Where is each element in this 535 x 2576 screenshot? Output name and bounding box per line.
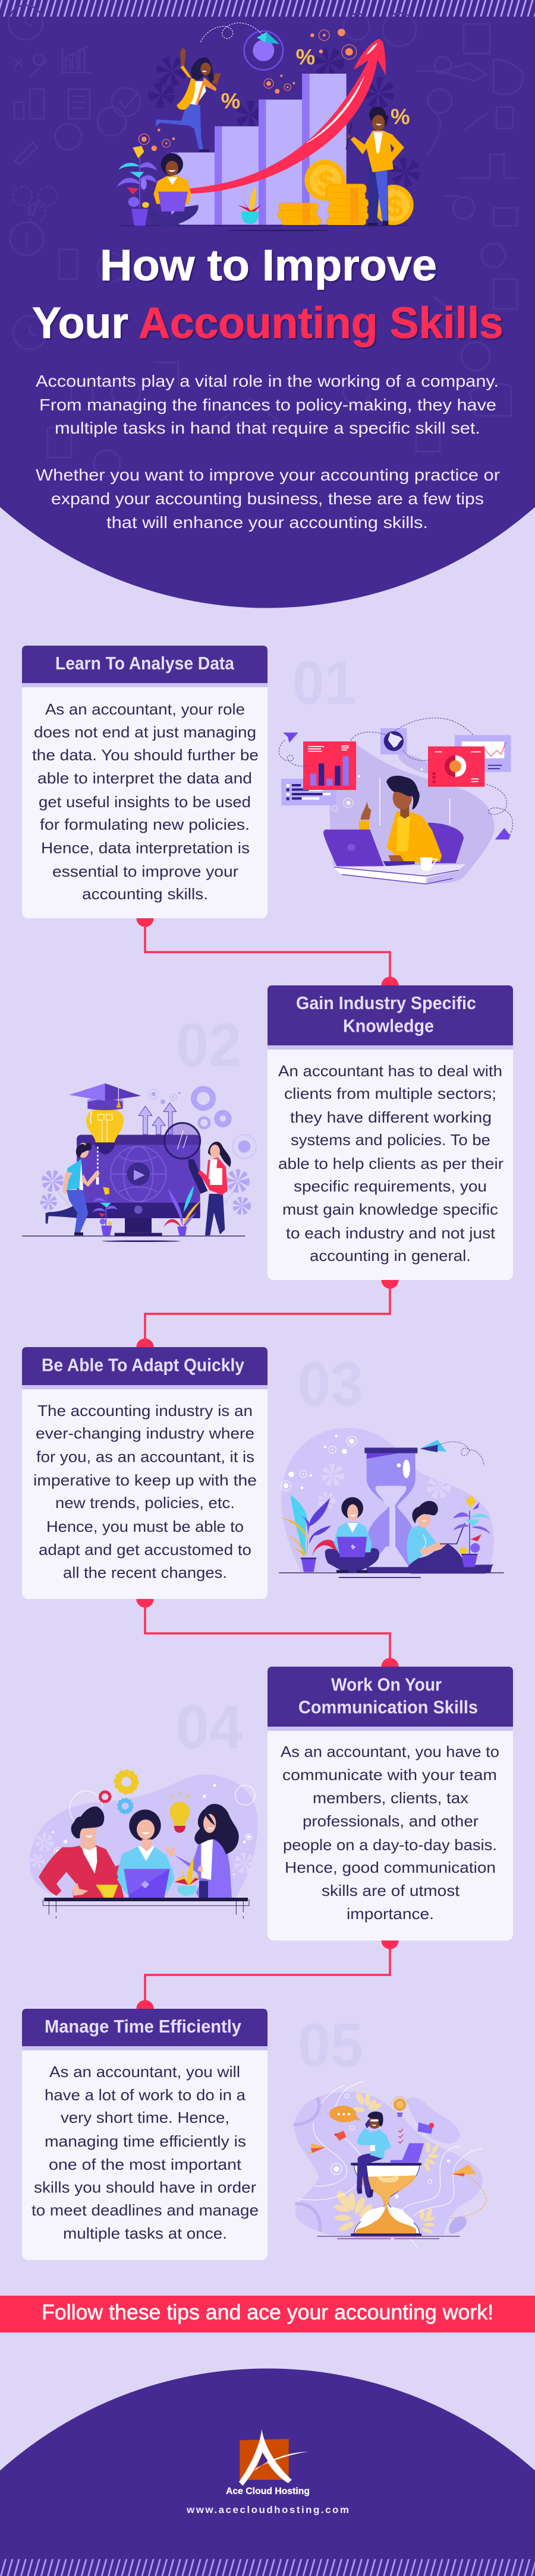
heading [298, 1674, 478, 1718]
intro text [36, 372, 500, 532]
company name: Ace Cloud Hosting [226, 2486, 310, 2496]
circle and paper plane [201, 23, 283, 70]
body text [281, 1743, 499, 1923]
title: How to Improve [100, 241, 437, 290]
body text: specific requirements, you [294, 1177, 487, 1195]
intro text: multiple tasks in hand that require a specific skill set. [55, 419, 480, 437]
intro text: that will enhance your accounting skills. [106, 513, 428, 532]
body text: imperative to keep up with the [33, 1471, 257, 1489]
body text: all the recent changes. [63, 1563, 227, 1581]
logo [239, 2429, 309, 2486]
body text: they have different working [290, 1108, 492, 1126]
body text: for formulating new policies. [40, 816, 250, 833]
body text: one of the most important [49, 2155, 242, 2173]
body text: As an accountant, your role [45, 700, 245, 718]
body text [33, 1402, 257, 1581]
callout: closing banner [0, 2296, 535, 2332]
heading: Work On Your [331, 1674, 442, 1695]
illustration: time management [293, 2081, 486, 2247]
body text: skills you should have in order [34, 2179, 256, 2196]
jumping woman [156, 48, 221, 152]
body text [278, 1062, 503, 1265]
body text: essential to improve your [52, 862, 238, 880]
body text: managing time efficiently is [45, 2132, 246, 2150]
orange dots [139, 29, 357, 151]
body text: able to help clients as per their [278, 1155, 503, 1172]
number 05: 05 [298, 2011, 363, 2080]
body text: skills are of utmost [322, 1882, 460, 1899]
body text [32, 2063, 259, 2242]
footer stripes [0, 2559, 535, 2576]
illustration: team communication [30, 1771, 258, 1918]
body text: Hence, data interpretation is [41, 839, 250, 856]
percent signs: % [221, 88, 240, 113]
body text: accounting skills. [82, 885, 208, 903]
body text: Hence, good communication [285, 1858, 496, 1876]
body text: must gain knowledge specific [282, 1200, 498, 1218]
website: www.acecloudhosting.com [186, 2504, 349, 2515]
coins: $ [317, 165, 334, 198]
heading: Communication Skills [298, 1696, 478, 1718]
body text: An accountant has to deal with [278, 1062, 502, 1080]
number 01: 01 [292, 649, 356, 718]
body text: Hence, you must be able to [46, 1518, 244, 1535]
intro text: Whether you want to improve your accounting practice or [36, 466, 500, 484]
title: Your [32, 298, 128, 347]
body text: members, clients, tax [313, 1789, 468, 1807]
heading: Learn To Analyse Data [55, 653, 235, 674]
leaves [156, 55, 413, 180]
panel: step 3 [22, 1347, 268, 1599]
body text: multiple tasks at once. [63, 2224, 227, 2242]
number 03: 03 [298, 1350, 363, 1419]
percent signs: % [296, 45, 315, 69]
illustration: data analyst [279, 718, 512, 884]
body text: to meet deadlines and manage [32, 2201, 259, 2219]
heading [296, 993, 476, 1036]
body text: get useful insights to be used [39, 793, 251, 811]
heading: Manage Time Efficiently [45, 2016, 242, 2037]
intro text: expand your accounting business, these are a few tips [51, 489, 484, 508]
body text: adapt and get accustomed to [39, 1541, 251, 1559]
ground [121, 225, 407, 231]
hero illustration [117, 23, 414, 231]
body text: The accounting industry is an [37, 1402, 253, 1420]
connector lines [136, 909, 399, 2018]
body text: people on a day-to-day basis. [283, 1836, 497, 1854]
intro text: From managing the finances to policy-making, they have [39, 396, 496, 414]
title: Accounting Skills [139, 298, 503, 347]
body text: for you, as an accountant, it is [36, 1448, 254, 1466]
body text: importance. [347, 1905, 434, 1923]
body text: ever-changing industry where [36, 1424, 254, 1442]
body text: very short time. Hence, [61, 2109, 229, 2126]
plant [117, 146, 158, 226]
percent signs [221, 45, 410, 129]
coins: $ [386, 190, 403, 223]
bars [171, 74, 347, 225]
potted plant center [238, 186, 262, 224]
body text: professionals, and other [303, 1812, 479, 1830]
heading: Knowledge [343, 1016, 434, 1036]
illustration: hourglass and people [278, 1428, 504, 1578]
callout: closing banner: Follow these tips and ace your accounting work! [42, 2300, 493, 2324]
panel: hero header [0, 0, 535, 608]
body text: systems and policies. To be [291, 1131, 490, 1149]
panel: step 4 [268, 1667, 513, 1940]
number 04: 04 [176, 1693, 243, 1762]
body text: clients from multiple sectors; [284, 1085, 496, 1102]
panel: step 2 [268, 985, 513, 1280]
body text: communicate with your team [282, 1766, 497, 1784]
coins [278, 160, 414, 225]
body text: does not end at just managing [34, 723, 256, 741]
panel: footer [0, 2369, 535, 2576]
body text: the data. You should further be [32, 746, 259, 764]
panel: step 1 [22, 646, 268, 918]
top stripes [0, 0, 535, 17]
standing person [346, 106, 404, 226]
body text [32, 700, 259, 903]
body text: As an accountant, you have to [281, 1743, 499, 1760]
growth arrow [189, 39, 386, 194]
heading: Gain Industry Specific [296, 993, 476, 1013]
panel: step 5 [22, 2009, 268, 2260]
body text: new trends, policies, etc. [55, 1494, 235, 1512]
faint background icons [8, 5, 523, 476]
sitting person [149, 153, 199, 227]
title [32, 241, 503, 347]
percent signs: % [391, 105, 410, 129]
heading: Be Able To Adapt Quickly [42, 1354, 245, 1376]
body text: As an accountant, you will [49, 2063, 240, 2081]
number 02: 02 [176, 1011, 241, 1080]
body text: accounting in general. [310, 1247, 471, 1265]
illustration: knowledge monitor [22, 1083, 256, 1242]
body text: to each industry and not just [286, 1224, 496, 1242]
body text: have a lot of work to do in a [45, 2086, 246, 2104]
body text: able to interpret the data and [37, 769, 252, 787]
intro text: Accountants play a vital role in the working of a company. [36, 372, 499, 390]
